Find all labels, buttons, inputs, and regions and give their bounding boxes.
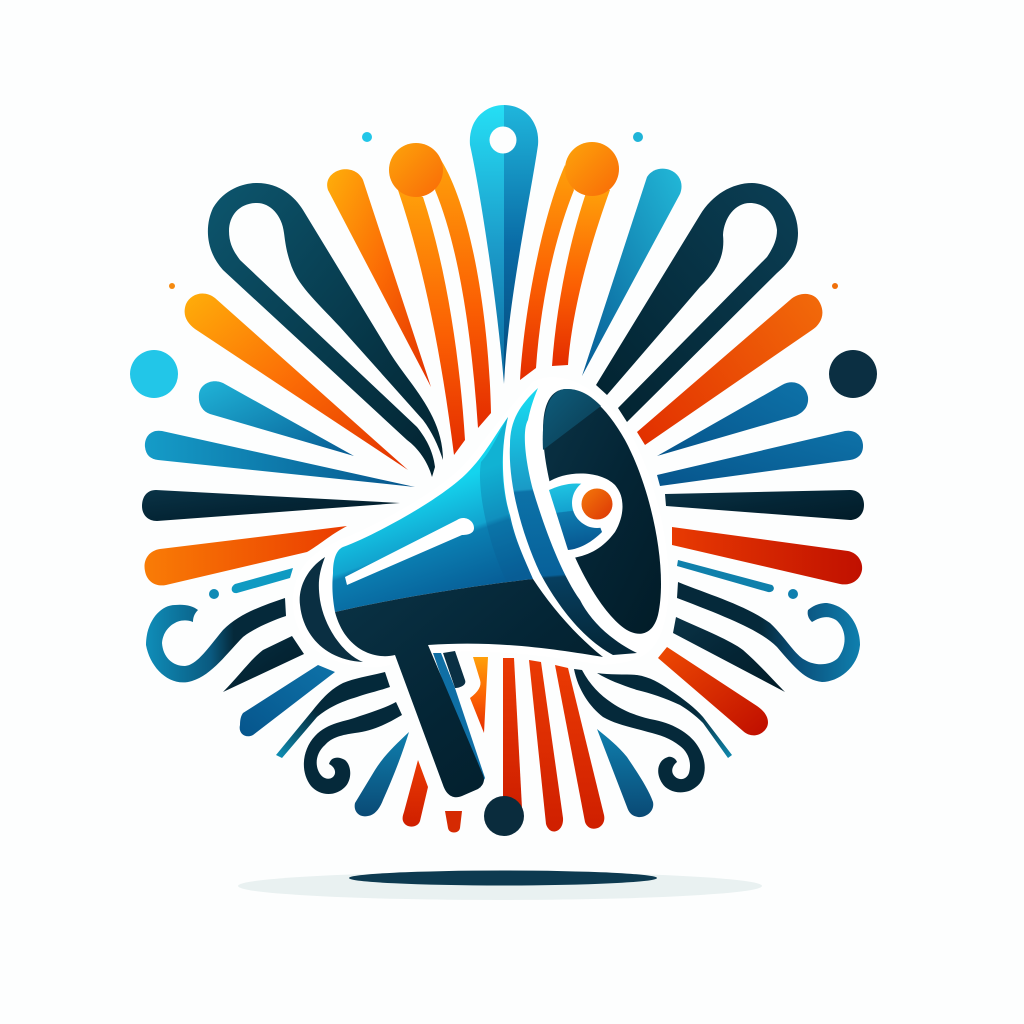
handle back piece (433, 651, 485, 788)
back cap (300, 557, 363, 662)
ray: long blue left (145, 431, 415, 487)
bell mouth highlight corner (543, 389, 601, 450)
ray: dark loop right (596, 183, 798, 422)
ray: orange-red left (145, 526, 347, 585)
wave: thin left (276, 672, 390, 758)
rays: lower right (574, 560, 860, 817)
ray: long blue right (657, 431, 863, 486)
ray: thin blue right (677, 560, 774, 592)
ray: red diagonal right (658, 647, 768, 735)
icon: dark ball (484, 796, 524, 836)
dots: small accents (169, 132, 838, 599)
ray: red drop left (403, 760, 428, 827)
curl: right (574, 669, 705, 792)
ray: short red (445, 811, 462, 832)
ray: blue drop right (597, 729, 653, 817)
ray: orange right diagonal (637, 294, 822, 445)
ray: short blue right (657, 382, 808, 456)
driver: eye (547, 473, 622, 558)
rays: bottom center (445, 657, 604, 836)
ray: short blue left (199, 381, 354, 456)
bell band (510, 388, 637, 655)
megaphone (300, 385, 661, 797)
ground shadow (238, 870, 762, 900)
rays: upper right (169, 132, 877, 599)
rays: upper left (130, 143, 491, 585)
hook: left (146, 598, 286, 682)
ray: blue stroke left (240, 665, 335, 736)
ray: small orange behind handle (470, 657, 488, 733)
icon: cyan dot left (130, 350, 178, 398)
wave: thin right (597, 673, 732, 758)
ray: orange tapered (327, 169, 431, 387)
ray: dark loop left (208, 183, 443, 477)
ray: top teardrop with hole (470, 105, 538, 384)
ray: red middle (529, 660, 563, 832)
ray: big orange diagonal (185, 293, 408, 470)
ray: dark right (665, 490, 864, 520)
ray: red center (503, 658, 522, 808)
bell mouth (543, 389, 661, 634)
cone: blue upper (332, 417, 533, 612)
ray: red right (555, 665, 604, 829)
rays: lower left (146, 568, 428, 827)
white halo (301, 385, 661, 659)
icon: dark dot right (829, 350, 877, 398)
ray: blue drop left (355, 732, 409, 816)
ray: orange twin stripes with ball right (520, 142, 619, 380)
hook: right (677, 582, 860, 682)
ray: orange twin stripes with ball (389, 143, 491, 455)
ray: thin blue left (232, 568, 293, 593)
cone: shaded section (480, 417, 533, 582)
cone and handle: dark lower (335, 579, 603, 797)
ray: dark tip right (673, 617, 785, 692)
curl: left (304, 702, 402, 794)
highlight bar (345, 518, 474, 585)
ray: dark tip left (223, 636, 304, 692)
ray: orange-red right (672, 527, 862, 584)
ray: blue right (582, 169, 682, 376)
ray: dark left (142, 490, 400, 521)
